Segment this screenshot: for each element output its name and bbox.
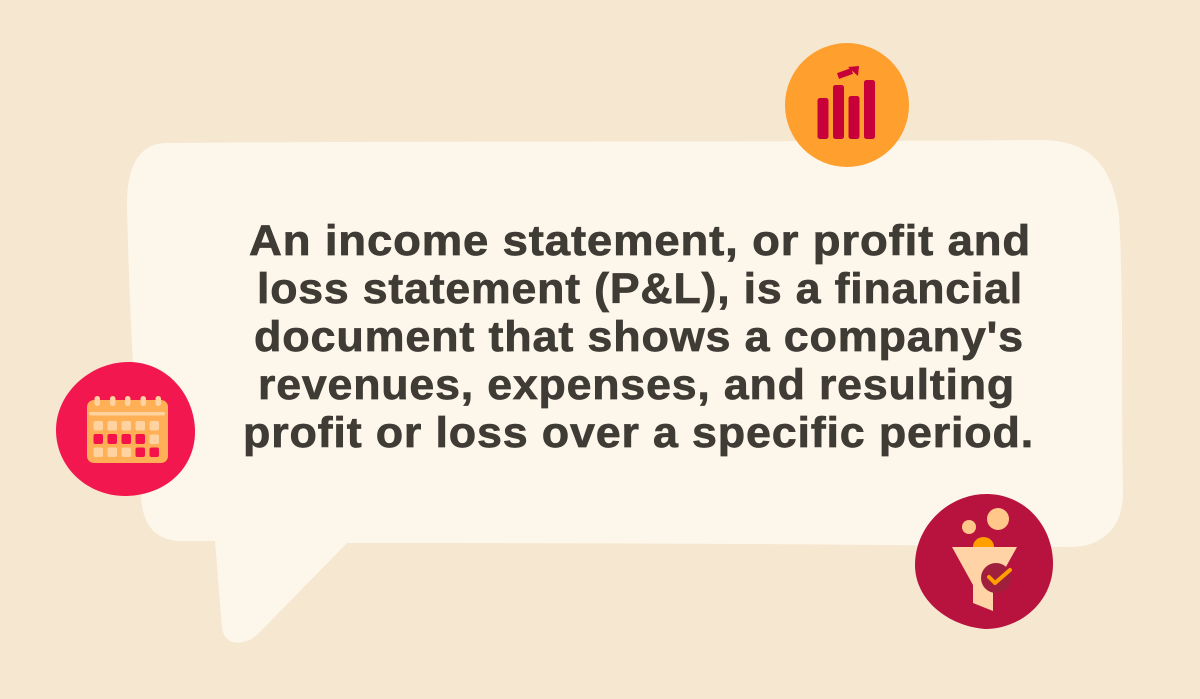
definition text block — [243, 217, 1034, 457]
icon: calendar — [56, 362, 195, 496]
definition text block: profit or loss over a specific period. — [243, 409, 1034, 457]
definition text block: An income statement, or profit and — [249, 217, 1031, 265]
icon: bar chart with rising arrow — [785, 43, 909, 167]
speech bubble panel — [127, 140, 1123, 643]
definition text block: loss statement (P&L), is a financial — [257, 265, 1023, 313]
icon: funnel with checkmark — [915, 494, 1053, 629]
definition text block: document that shows a company's — [254, 313, 1024, 361]
definition text block: revenues, expenses, and resulting — [258, 361, 1015, 409]
